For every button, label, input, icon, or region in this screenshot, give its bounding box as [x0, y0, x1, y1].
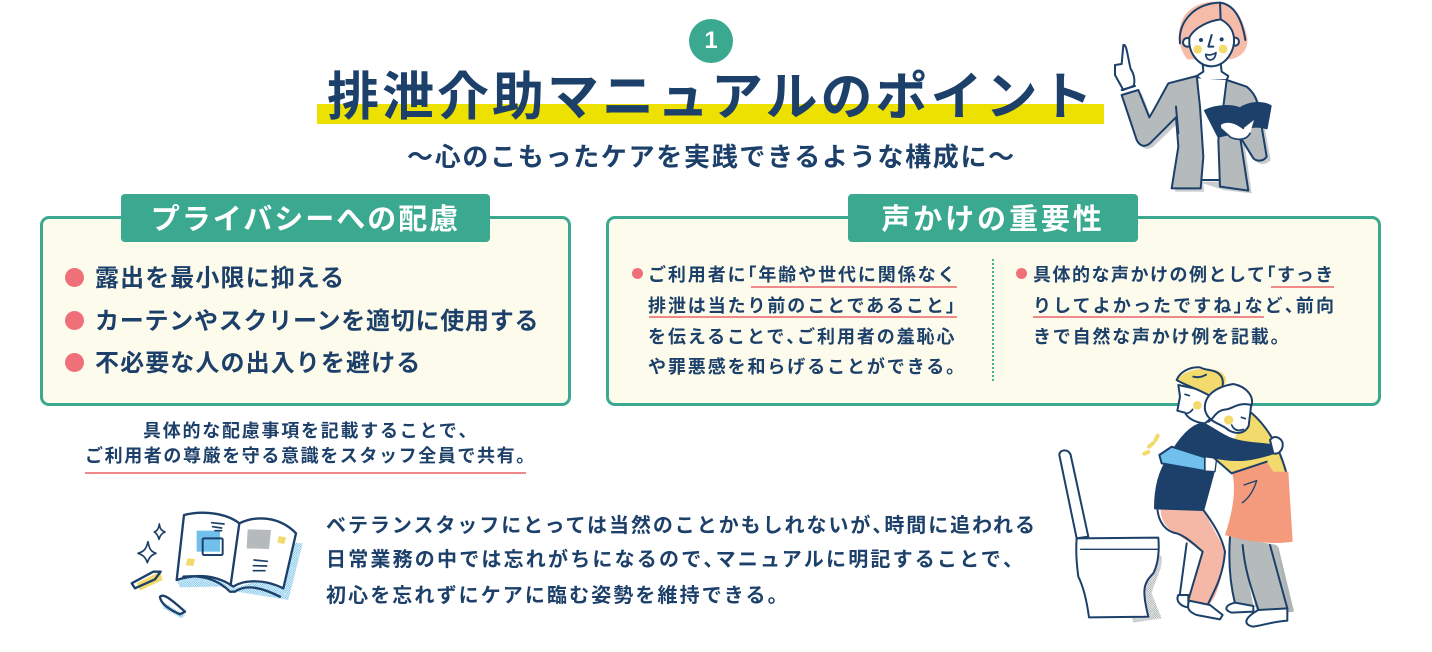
line 2: 日常業務の中では忘れがちになるので、マニュアルに明記することで、 [326, 549, 1015, 571]
bullet 3 [65, 353, 84, 372]
book shadow [177, 542, 303, 600]
illustration: open manual with sparkles [132, 513, 303, 618]
crayon yellow [137, 572, 163, 591]
subtitle: 〜心のこもったケアを実践できるような構成に〜 [407, 142, 1016, 172]
heading: voice: 声かけの重要性 [881, 204, 1105, 236]
underline 2 [649, 316, 957, 318]
caption underline [85, 472, 526, 474]
line 3: を伝えることで、ご利用者の羞恥心 [648, 327, 956, 347]
line 4: や罪悪感を和らげることができる。 [648, 357, 966, 377]
caption line 2: ご利用者の尊厳を守る意識をスタッフ全員で共有。 [85, 446, 527, 466]
glove [1159, 447, 1205, 471]
panel: voice [606, 194, 1381, 406]
heading: privacy: プライバシーへの配慮 [151, 204, 460, 236]
yellow highlight bar [317, 104, 1104, 124]
step number badge [689, 19, 733, 63]
bullet [632, 268, 643, 279]
item 3: 不必要な人の出入りを避ける [95, 350, 421, 377]
patient legs [1247, 545, 1294, 615]
illustration: caregiver helping person to toilet [1059, 367, 1294, 627]
underline 1 [751, 286, 957, 288]
underline 1 [1271, 286, 1334, 288]
toilet shadow [1125, 545, 1162, 623]
text block: voice left [632, 265, 966, 377]
panel background [606, 216, 1381, 406]
heading: voice [848, 194, 1138, 242]
patient apron [1225, 462, 1293, 543]
patient hand [1270, 437, 1283, 454]
sparkles [138, 524, 165, 563]
line 1: ご利用者に「年齢や世代に関係なく [648, 265, 957, 285]
step number badge: 1 [704, 27, 718, 54]
pages [177, 513, 296, 588]
underline 2 [1033, 316, 1264, 318]
line 2: りしてよかったですね」など、前向 [1033, 296, 1336, 316]
text block: voice right [1016, 265, 1336, 347]
line 3: 初心を忘れずにケアに臨む姿勢を維持できる。 [326, 585, 790, 607]
caption line 1: 具体的な配慮事項を記載することで、 [143, 421, 469, 441]
crayon blue [162, 602, 185, 618]
item 1: 露出を最小限に抑える [95, 265, 345, 292]
bullet 2 [65, 311, 84, 330]
panel: privacy [40, 194, 571, 406]
bullet list: privacy [65, 265, 539, 377]
panel background [40, 216, 571, 406]
bullet 1 [65, 268, 84, 287]
patient head [1205, 384, 1252, 433]
text block: bottom paragraph [326, 514, 1037, 607]
item 2: カーテンやスクリーンを適切に使用する [95, 308, 539, 335]
bullet [1016, 268, 1027, 279]
helper legs [1161, 509, 1225, 605]
illustration: teacher with book [1115, 2, 1271, 193]
toilet [1059, 450, 1088, 538]
title with yellow highlight [317, 69, 1104, 127]
title text: 排泄介助マニュアルのポイント [327, 69, 1095, 127]
note: privacy caption [85, 421, 527, 474]
line 1: 具体的な声かけの例として「すっき [1033, 265, 1335, 285]
line 1: ベテランスタッフにとっては当然のことかもしれないが、時間に追われる [326, 515, 1037, 537]
helper head [1177, 385, 1217, 423]
helper torso and arm [1155, 423, 1273, 510]
motion marks [1144, 436, 1158, 454]
patient sweater [1212, 412, 1287, 472]
line 3: きで自然な声かけ例を記載。 [1033, 327, 1290, 347]
heading: privacy [121, 194, 490, 242]
line 2: 排泄は当たり前のことであること」 [648, 296, 957, 316]
